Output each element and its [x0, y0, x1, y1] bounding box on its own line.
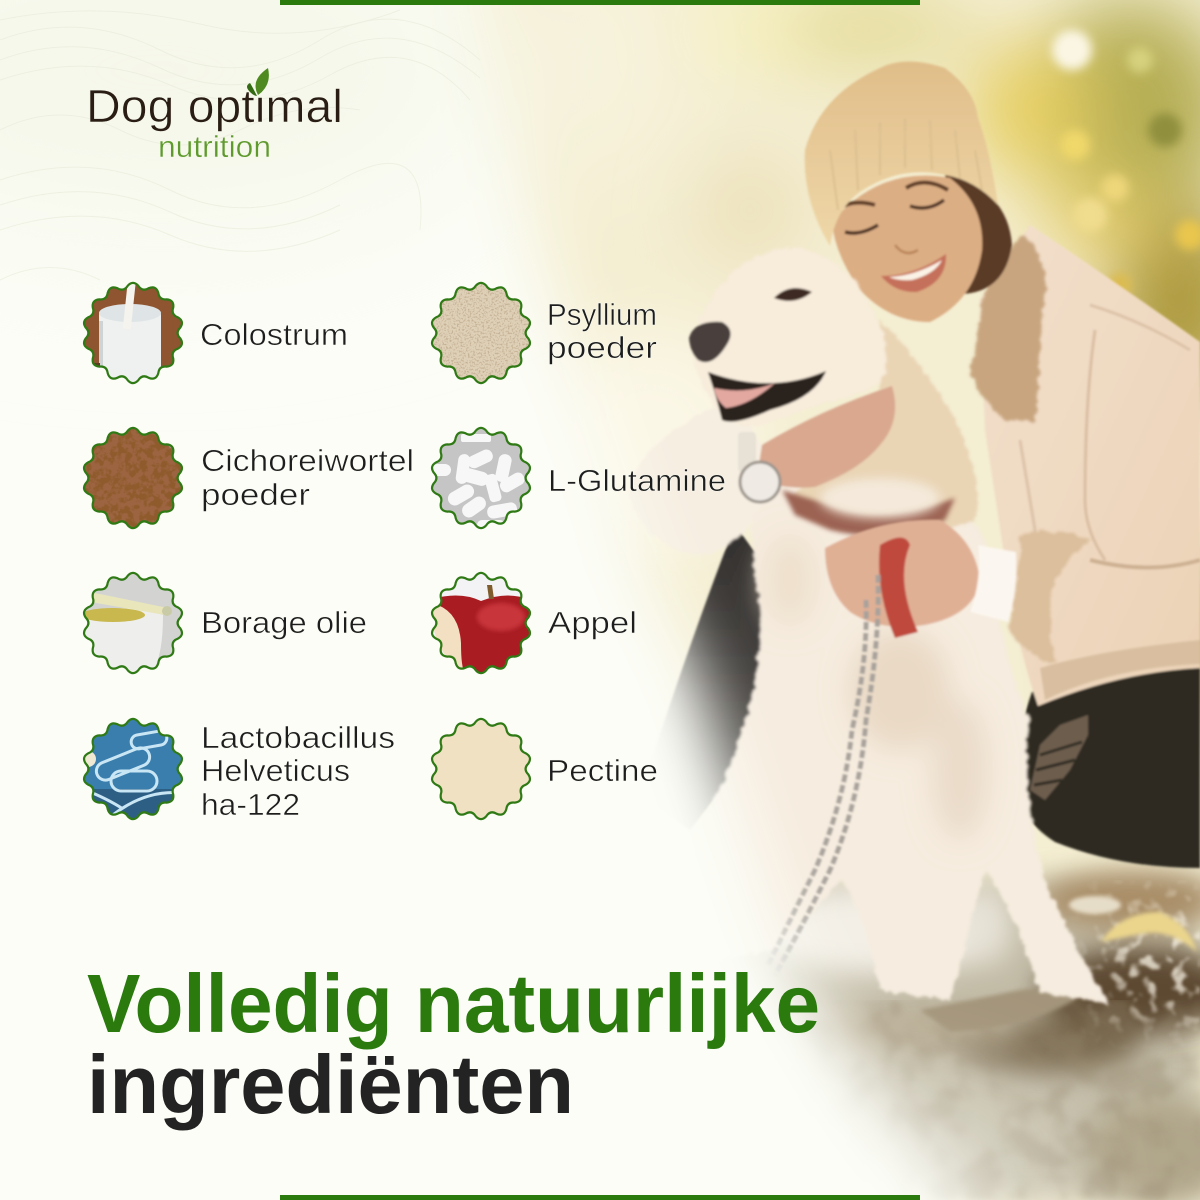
badge: psyllium powder [426, 278, 536, 388]
label [201, 443, 414, 512]
label: Cichoreiwortel [201, 443, 414, 478]
label: Borage olie [201, 605, 367, 640]
red leash loop [879, 538, 918, 638]
logo wordmark: Dog optimal [86, 80, 343, 132]
label: Psyllium [547, 297, 657, 332]
logo [86, 68, 343, 164]
ingredient: Borage olie [78, 568, 367, 678]
badge: red apple [426, 568, 536, 678]
logo sub-wordmark: nutrition [158, 129, 271, 164]
ingredient: L-Glutamine [426, 423, 726, 533]
ingredient: Pectine [432, 719, 658, 819]
label: L-Glutamine [548, 463, 726, 498]
photo: woman and golden retriever [628, 62, 1200, 1004]
label: Lactobacillus [201, 720, 395, 755]
woman: fur collar [970, 235, 1046, 422]
label: ha-122 [201, 787, 300, 822]
woman: hand on dog neck [757, 386, 895, 488]
woman: wrist watch [738, 432, 780, 502]
woman: hair [945, 172, 1012, 294]
label: Appel [548, 605, 637, 640]
dog: body [690, 480, 1110, 1004]
logo leaf icon [247, 68, 269, 96]
dog: ruff and neck fur [790, 320, 978, 531]
woman: jacket [980, 225, 1200, 706]
woman: arm around dog [649, 410, 762, 552]
headline [87, 957, 820, 1131]
label: Colostrum [200, 317, 348, 352]
ingredient: Lactobacillus Helveticus ha-122 [78, 714, 395, 824]
ingredient: Colostrum [78, 278, 348, 393]
woman: dark jeans [1015, 663, 1200, 868]
badge: milk glass [78, 278, 188, 393]
label: poeder [547, 330, 657, 365]
ingredient: Appel [426, 568, 637, 678]
label [201, 720, 395, 822]
ingredient: Cichoreiwortel poeder [78, 423, 414, 533]
dog: pale chest tuft [820, 478, 940, 518]
dog: red-brown collar [782, 490, 955, 536]
background photo: autumn bokeh [466, 0, 1200, 1200]
label [547, 297, 657, 365]
woman: white wrist cuff [970, 545, 1016, 622]
woman: face [832, 176, 982, 322]
bottom accent bar [280, 1195, 920, 1200]
dog: head [689, 247, 886, 426]
badge: brown powder [78, 423, 188, 533]
badge: white capsules [426, 423, 536, 533]
woman: hand holding leash [825, 520, 980, 627]
label: Pectine [547, 753, 658, 788]
top accent bar [280, 0, 920, 5]
badge: blue bacteria [78, 714, 188, 824]
woman: sleeve fur cuff [1008, 531, 1090, 665]
dog: chest fur shading [765, 535, 988, 840]
woman: beanie hat [805, 62, 998, 246]
label: poeder [201, 477, 310, 512]
ground with fallen leaves [772, 855, 1200, 1200]
headline line 2: ingrediënten [87, 1038, 574, 1131]
top-left soft tint [0, 0, 500, 220]
badge: oil bowl and dropper [78, 568, 188, 678]
badge: pectine powder [432, 719, 530, 819]
headline line 1: Volledig natuurlijke [87, 957, 820, 1050]
decorative wave texture [0, 10, 480, 280]
ingredient: Psyllium poeder [426, 278, 657, 388]
metal chain leash [768, 575, 878, 975]
label: Helveticus [201, 753, 350, 788]
woman: left legging [640, 525, 805, 830]
faded photo: autumn park, woman and golden retriever [466, 0, 1200, 1200]
